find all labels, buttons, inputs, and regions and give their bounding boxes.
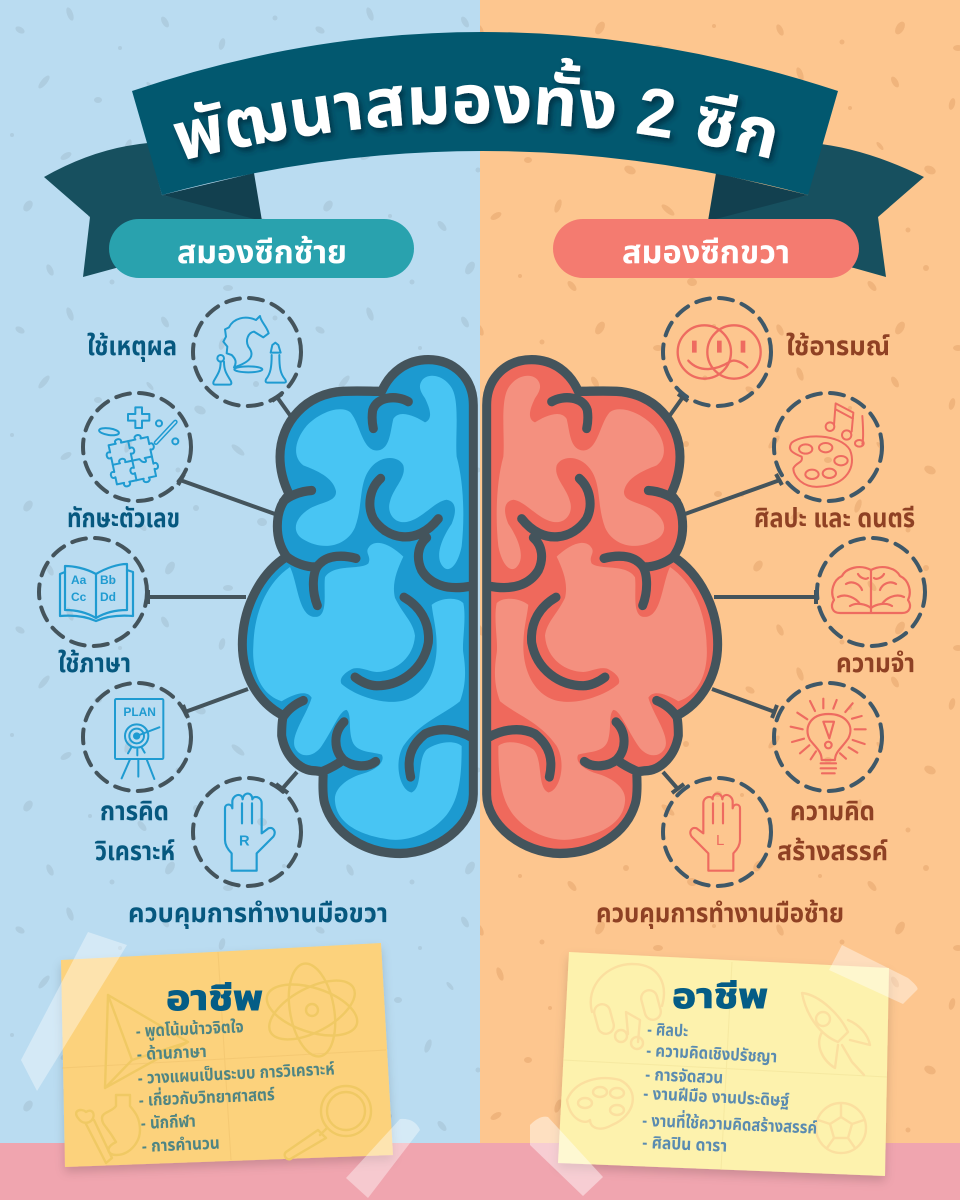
upper light lobe	[296, 376, 463, 569]
brain base outline fill	[487, 360, 718, 853]
career list: - ความคิดเชิงปรัชญา	[646, 1041, 778, 1066]
note title: อาชีพ	[672, 977, 768, 1016]
dashed circle icon: plan target board: PLAN	[123, 705, 156, 719]
label: right-hand control: ควบคุมการทำงานมือขวา	[128, 898, 388, 929]
ribbon fold right	[708, 173, 808, 221]
note title: อาชีพ	[166, 979, 263, 1018]
lower light lobe	[253, 543, 465, 840]
dashed circle icon: light bulb	[774, 683, 882, 791]
career list	[135, 1017, 335, 1156]
label: analytical thinking	[95, 796, 175, 866]
label: reason: ใช้เหตุผล	[87, 331, 177, 362]
tape: left note bottom	[346, 1119, 420, 1198]
pill heading: left brain	[109, 219, 414, 278]
doodle: atom	[260, 960, 364, 1060]
ribbon banner with title	[44, 32, 924, 277]
label: emotion: ใช้อารมณ์	[786, 331, 890, 361]
career list: - นักกีฬา	[140, 1112, 196, 1133]
ribbon tail right	[708, 143, 924, 277]
doodle: football	[816, 1103, 866, 1153]
career list: - วางแผนเป็นระบบ การวิเคราะห์	[137, 1059, 335, 1088]
lower light lobe	[495, 543, 707, 840]
pale yellow paper	[558, 952, 889, 1176]
paper fold lines	[563, 962, 887, 1170]
note: left careers	[61, 943, 393, 1167]
dashed circle icon: language book: Aa	[71, 573, 87, 587]
dashed circle icon: emotion faces	[663, 298, 771, 406]
label: language: ใช้ภาษา	[58, 648, 131, 678]
upper light lobe	[497, 376, 664, 569]
dashed circle icon: plan target board	[83, 683, 191, 791]
connector lines left	[148, 394, 297, 793]
doodle: headphones and notes	[591, 964, 664, 1049]
doodle: magnifier	[285, 1086, 371, 1159]
tape: left note top	[21, 932, 127, 1091]
dashed circle icon: math puzzle	[83, 393, 191, 501]
connector lines right	[663, 394, 816, 793]
dashed circle icon: language book: Cc	[71, 590, 87, 604]
dashed circle icon: chess pieces	[193, 298, 301, 406]
career list: - ด้านภาษา	[136, 1042, 207, 1064]
career list	[642, 1020, 818, 1156]
label: analytical thinking: วิเคราะห์	[95, 836, 175, 866]
brain base outline fill	[242, 360, 473, 853]
label: creative thinking: ความคิด	[790, 796, 875, 826]
label: number skill: ทักษะตัวเลข	[67, 503, 180, 533]
yellow paper	[61, 943, 393, 1167]
pill heading: left brain: สมองซีกซ้าย	[177, 234, 347, 270]
dashed circle icon: language book	[39, 538, 147, 646]
brain right hemisphere	[487, 360, 718, 853]
career list: - งานฝีมือ งานประดิษฐ์	[643, 1084, 790, 1110]
pill heading: right brain: สมองซีกขวา	[622, 234, 790, 270]
career list: - เกี่ยวกับวิทยาศาสตร์	[138, 1082, 275, 1110]
dashed circle icon: left hand: L	[716, 832, 724, 849]
tape: right note bottom	[530, 1117, 603, 1196]
doodle: palette	[567, 1078, 633, 1129]
dashed circle icon: right hand: R	[239, 834, 250, 850]
dashed circle icon: language book: Dd	[100, 590, 116, 604]
dashed circle icon: language book: Bb	[100, 573, 116, 587]
pill heading: right brain	[553, 219, 859, 278]
doodle: triangle pyramid	[105, 995, 188, 1088]
career list: - การจัดสวน	[645, 1065, 724, 1087]
dashed circle icon: right hand	[193, 778, 301, 886]
tape: right note top	[829, 945, 918, 1004]
title: พัฒนาสมองทั้ง 2 ซีก	[173, 58, 780, 165]
career list: - งานที่ใช้ความคิดสร้างสรรค์	[642, 1108, 818, 1138]
label: creative thinking	[777, 796, 888, 866]
label: creative thinking: สร้างสรรค์	[777, 836, 888, 866]
note: right careers	[558, 952, 889, 1176]
career list: - การคำนวน	[141, 1134, 220, 1156]
career list: - พูดโน้มน้าวจิตใจ	[135, 1017, 244, 1042]
label: art and music: ศิลปะ และ ดนตรี	[754, 503, 915, 533]
brain outline and folds	[242, 360, 473, 853]
dashed circle icon: brain memory	[817, 538, 925, 646]
paper fold lines	[62, 952, 386, 1160]
doodle: rocket	[802, 993, 870, 1075]
ribbon main arc	[132, 32, 838, 195]
dashed circle icon: left hand	[663, 778, 771, 886]
ribbon fold left	[162, 173, 262, 221]
label: memory: ความจำ	[836, 648, 915, 678]
brain outline and folds	[487, 360, 718, 853]
career list: - ศิลปะ	[647, 1020, 689, 1041]
brain left hemisphere	[242, 360, 473, 853]
label: left-hand control: ควบคุมการทำงานมือซ้าย	[596, 898, 844, 929]
label: analytical thinking: การคิด	[100, 796, 169, 826]
dashed circle icon: palette and music	[774, 393, 882, 501]
career list: - ศิลปิน ดารา	[642, 1133, 728, 1156]
doodle: flasks	[76, 1095, 140, 1163]
ribbon tail left	[44, 143, 262, 277]
